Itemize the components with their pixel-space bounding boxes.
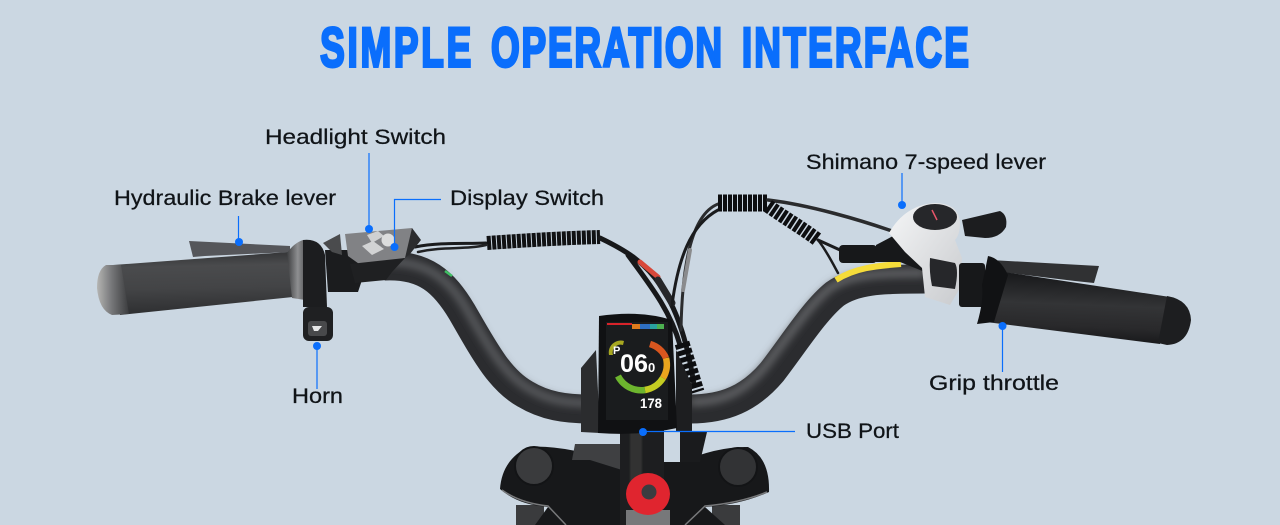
brake lever — [189, 241, 290, 257]
display mount — [581, 350, 600, 433]
battery bar — [607, 323, 664, 329]
yellow sticker — [836, 264, 901, 280]
knob right — [719, 448, 757, 486]
P gauge: P — [613, 345, 620, 357]
title: OPERATION — [491, 17, 722, 79]
grip flange — [977, 256, 1008, 324]
odometer: 178 — [640, 395, 662, 411]
shifter gauge — [913, 204, 957, 230]
callout: Shimano 7-speed lever: Shimano 7-speed lever — [806, 151, 1046, 174]
callout: Headlight Switch — [265, 126, 446, 233]
shifter white body — [889, 203, 962, 305]
shifter thumb lever — [962, 211, 1006, 238]
knob left — [515, 447, 553, 485]
callout: Hydraulic Brake lever — [114, 187, 336, 246]
callout: Horn — [292, 342, 343, 408]
shifter dark wedge — [876, 236, 925, 272]
shifter button — [930, 258, 957, 289]
title: SIMPLE — [320, 17, 471, 79]
brake lever right — [990, 260, 1099, 283]
screen — [606, 322, 668, 420]
connector — [839, 245, 877, 263]
title: INTERFACE — [742, 17, 969, 79]
red cap — [626, 473, 670, 525]
grip — [986, 272, 1170, 344]
callout: Headlight Switch: Headlight Switch — [265, 126, 446, 149]
display — [581, 314, 692, 434]
horn button — [303, 307, 333, 341]
callout: USB Port: USB Port — [806, 420, 899, 443]
cables — [415, 200, 892, 392]
grip — [113, 252, 293, 315]
title — [320, 17, 969, 79]
grip end cap — [97, 265, 129, 315]
callout: Grip throttle — [929, 322, 1059, 395]
grip collar — [287, 240, 305, 300]
triple clamp and stem — [500, 430, 769, 525]
callout: Grip throttle: Grip throttle — [929, 372, 1059, 395]
callout: Hydraulic Brake lever: Hydraulic Brake lever — [114, 187, 336, 210]
speed readout: 06 — [620, 350, 648, 378]
callout: Display Switch — [390, 187, 604, 251]
shifter and right grip assembly — [839, 203, 1191, 345]
speed gauge — [618, 344, 667, 390]
callout: USB Port — [639, 420, 899, 443]
grip end cap — [1158, 296, 1191, 345]
display body — [598, 314, 677, 434]
callout: Shimano 7-speed lever — [806, 151, 1046, 209]
clamp — [959, 263, 985, 307]
green sticker — [445, 271, 452, 276]
clamp — [325, 250, 368, 292]
switch pod — [323, 234, 342, 255]
left grip assembly — [97, 228, 421, 341]
collar ring — [303, 240, 327, 307]
callout: Display Switch: Display Switch — [450, 187, 604, 210]
display: 0 — [648, 360, 655, 375]
handlebar — [384, 262, 925, 409]
callout: Horn: Horn — [292, 385, 343, 408]
